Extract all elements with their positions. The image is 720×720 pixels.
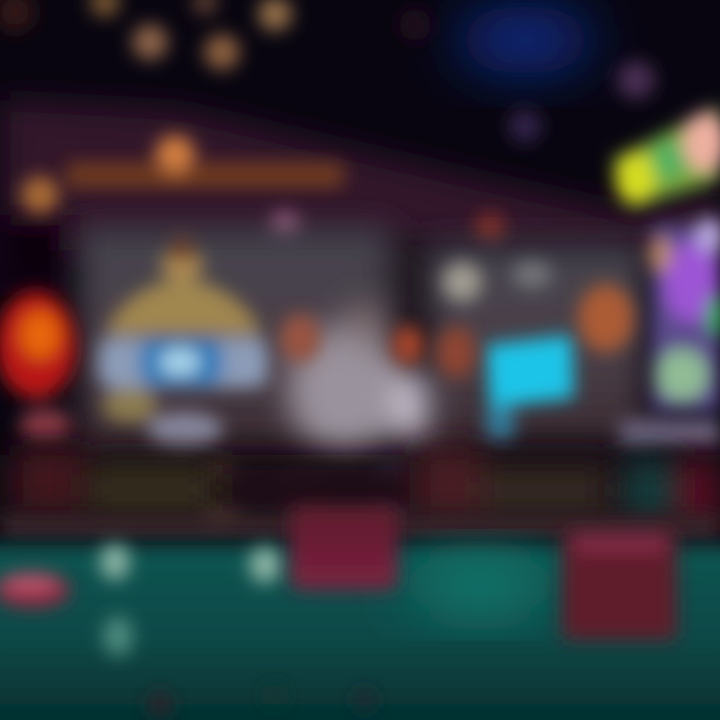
table highlight xyxy=(410,557,550,613)
faint floor marks xyxy=(148,685,375,717)
table edge xyxy=(0,515,720,539)
machine lamps xyxy=(436,261,634,378)
cyan screen xyxy=(484,335,574,443)
table glows xyxy=(100,544,281,656)
person details xyxy=(202,314,424,525)
lower machine band xyxy=(0,445,720,530)
casino table xyxy=(0,545,720,720)
machine arch xyxy=(98,237,268,448)
red glow xyxy=(0,291,76,441)
machine panels xyxy=(78,228,645,453)
blue glow xyxy=(455,6,595,74)
ceiling band xyxy=(0,100,720,295)
purple lamps xyxy=(399,9,655,143)
orange lamps xyxy=(21,135,505,243)
neon sign xyxy=(612,105,720,208)
ceiling lights xyxy=(0,0,292,70)
colourful right panel xyxy=(620,217,720,446)
red chip stacks xyxy=(0,505,677,640)
person figure xyxy=(287,303,430,456)
orange ceiling strip xyxy=(65,162,345,188)
